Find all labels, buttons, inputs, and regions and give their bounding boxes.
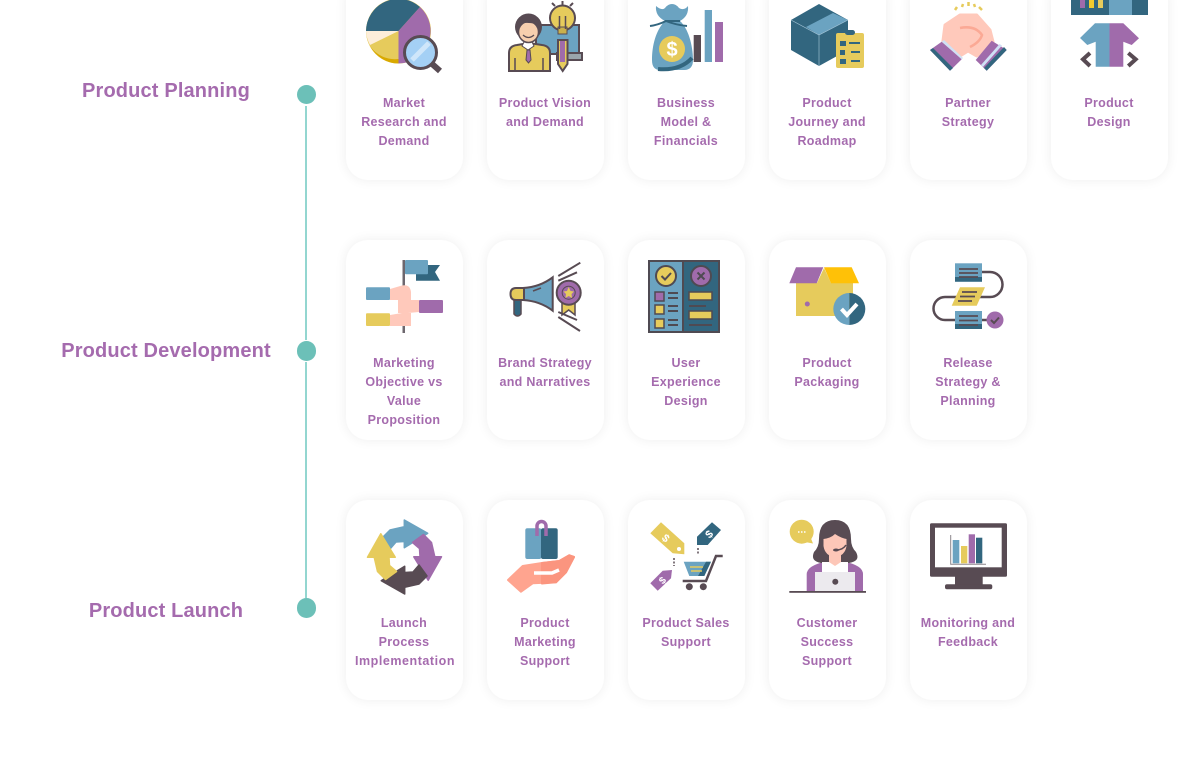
label: and Narratives — [499, 374, 591, 388]
card: Release Strategy & Planning — [910, 240, 1027, 440]
label: Support — [661, 634, 711, 648]
label: Launch — [381, 616, 427, 630]
label: Product — [1084, 96, 1134, 110]
card: Product Vision and Demand — [487, 0, 604, 180]
icon: price tags and shopping cart: $ — [659, 532, 672, 545]
card: Customer Success Support — [769, 500, 886, 700]
heading: Product Development: Product Development — [61, 340, 271, 362]
icon: hand holding bag — [507, 520, 575, 593]
label: Model & — [661, 114, 711, 128]
label: Monitoring and — [921, 616, 1015, 630]
label: Research and — [361, 114, 447, 128]
label: Strategy — [942, 114, 994, 128]
label: Marketing — [514, 634, 576, 648]
card: Marketing Objective vs Value Proposition — [346, 240, 463, 440]
label — [361, 96, 447, 148]
label: Product — [802, 356, 852, 370]
label: Support — [520, 654, 570, 668]
timeline segment: planning to development — [305, 106, 307, 340]
label: Customer — [797, 616, 857, 630]
label: Packaging — [794, 374, 860, 388]
card: Market Research and Demand — [346, 0, 463, 180]
timeline node: planning — [296, 84, 316, 104]
icon: open box with check — [789, 267, 866, 325]
card: Product Design — [1051, 0, 1168, 180]
label: Strategy & — [935, 374, 1001, 388]
icon: handshake high five — [930, 2, 1007, 71]
label: Success — [801, 634, 853, 648]
label: Value — [387, 394, 421, 408]
label — [365, 356, 443, 426]
card: Brand Strategy and Narratives — [487, 240, 604, 440]
timeline segment: development to launch — [305, 362, 307, 598]
card: Product Marketing Support — [487, 500, 604, 700]
icon: megaphone with badge — [510, 262, 582, 332]
label: Process — [379, 634, 429, 648]
label: Market — [383, 96, 425, 110]
label: Marketing — [373, 356, 435, 370]
icon: release flow — [932, 263, 1004, 329]
label — [788, 96, 866, 148]
heading: Product Planning: Product Planning — [82, 80, 250, 102]
icon: monitor with bar chart — [930, 523, 1007, 590]
label — [499, 96, 591, 128]
icon: price tags and shopping cart: $ — [703, 528, 716, 541]
label — [794, 356, 860, 388]
card: Launch Process Implementation — [346, 500, 463, 700]
label: Partner — [945, 96, 991, 110]
label — [797, 616, 857, 668]
label: Financials — [654, 134, 718, 148]
label: Journey and — [788, 114, 866, 128]
label: Demand — [378, 134, 430, 148]
label: Product Vision — [499, 96, 591, 110]
card: Partner Strategy — [910, 0, 1027, 180]
label: Brand Strategy — [498, 356, 592, 370]
label — [355, 616, 455, 668]
icon: support agent with laptop — [789, 520, 866, 593]
label: Release — [943, 356, 993, 370]
label — [498, 356, 592, 388]
label: Product — [802, 96, 852, 110]
label: Design — [664, 394, 708, 408]
label — [935, 356, 1001, 408]
label — [654, 96, 718, 148]
icon: flag and joined hands — [366, 260, 443, 333]
timeline node: launch — [296, 598, 316, 618]
card: User Experience Design — [628, 240, 745, 440]
label — [651, 356, 721, 408]
label: Implementation — [355, 654, 455, 668]
label: Support — [802, 654, 852, 668]
label — [514, 616, 576, 668]
label: Business — [657, 96, 715, 110]
icon: price tags and shopping cart — [650, 522, 723, 591]
label: Proposition — [368, 412, 440, 426]
heading: Product Launch: Product Launch — [89, 600, 243, 622]
card: Product Sales Support — [628, 500, 745, 700]
card: Monitoring and Feedback — [910, 500, 1027, 700]
label: Product Sales — [642, 616, 730, 630]
icon: pie chart with magnifier — [366, 0, 442, 74]
icon: comparison board — [648, 260, 720, 333]
label — [921, 616, 1015, 648]
label: Feedback — [938, 634, 998, 648]
label — [942, 96, 994, 128]
card: Business Model & Financials — [628, 0, 745, 180]
label: Product — [520, 616, 570, 630]
card: Product Packaging — [769, 240, 886, 440]
icon: money bag with bars: $ — [666, 39, 678, 61]
label — [1084, 96, 1134, 128]
card: Product Journey and Roadmap — [769, 0, 886, 180]
icon: shirt design — [1071, 0, 1148, 68]
icon: price tags and shopping cart: $ — [657, 575, 669, 587]
icon: money bag with bars — [650, 4, 723, 72]
label: Experience — [651, 374, 721, 388]
label: Objective vs — [365, 374, 443, 388]
label: User — [672, 356, 700, 370]
label — [642, 616, 730, 648]
label: Planning — [940, 394, 996, 408]
label: Roadmap — [797, 134, 857, 148]
icon: box and checklist — [791, 4, 864, 68]
icon: person with lightbulb and laptop — [508, 1, 583, 73]
label: Design — [1087, 114, 1131, 128]
icon: four-arrow cycle — [366, 519, 442, 595]
timeline node: development — [296, 341, 316, 360]
label: and Demand — [506, 114, 584, 128]
